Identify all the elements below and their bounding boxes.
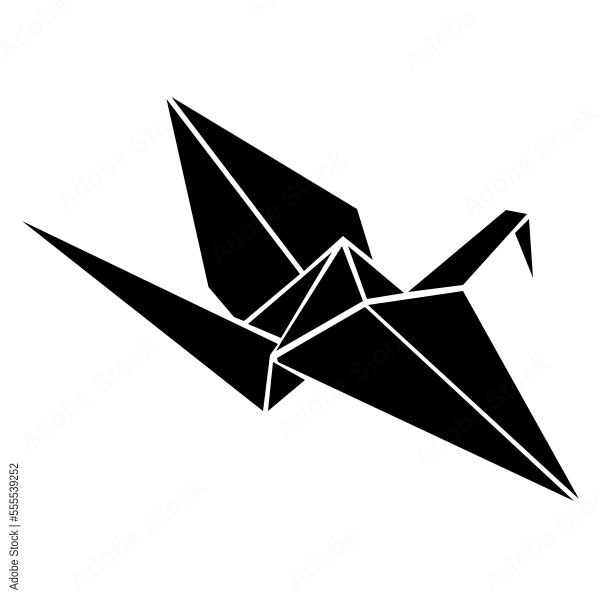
watermark text pattern: Adobe Stock [63, 471, 213, 597]
centre fold: upper right panel [348, 246, 404, 299]
watermark text pattern: Adobe Stock [13, 331, 163, 457]
body: upper right panel [368, 291, 579, 499]
centre fold: right panel [276, 246, 363, 351]
watermark text pattern: Adobe [397, 1, 482, 77]
body: lower left panel [277, 307, 574, 501]
watermark text pattern: Adobe Stock [50, 91, 200, 217]
stock credit: Adobe Stock | #555539252 [9, 463, 21, 590]
centre fold: left panel [248, 252, 332, 338]
left wing [22, 221, 278, 411]
watermark text pattern: Adobe Stock [203, 144, 353, 270]
upper wing: right panel [172, 97, 373, 271]
neck [408, 210, 527, 292]
origami crane [22, 97, 579, 501]
small triangle below the joint [268, 362, 305, 411]
watermark text pattern: Adobe [280, 521, 365, 597]
watermark text pattern: Adobe Stock [455, 97, 600, 223]
upper wing: left panel [166, 99, 300, 321]
head and beak [515, 219, 533, 278]
watermark text pattern: Adobe Stock [270, 319, 420, 445]
watermark text pattern: Adobe Stock [407, 347, 557, 473]
